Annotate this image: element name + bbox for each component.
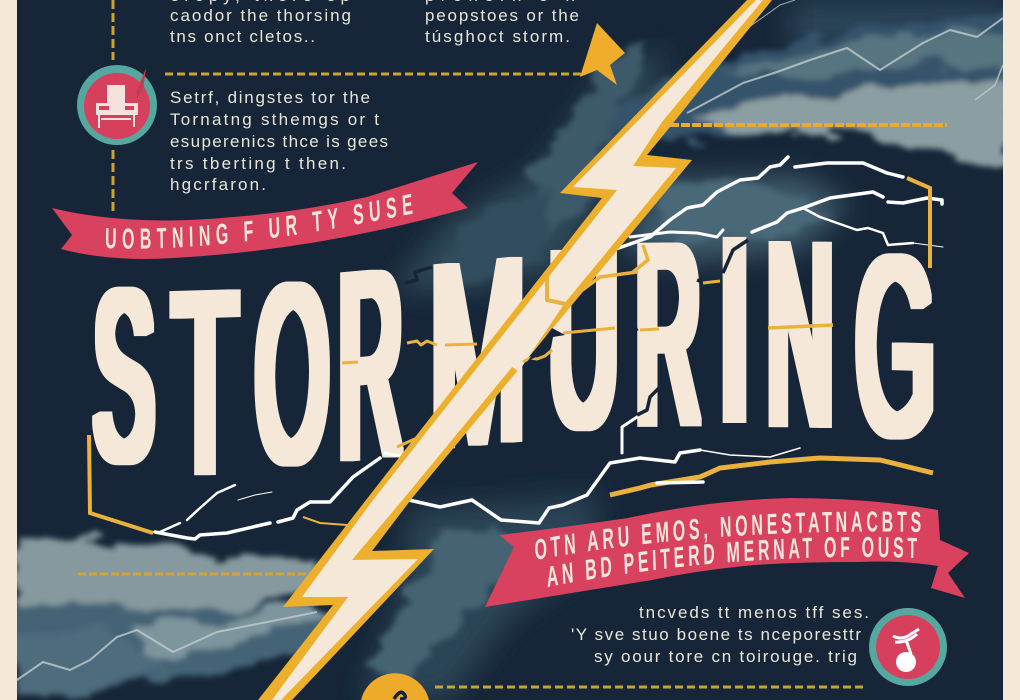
title: S — [94, 240, 154, 511]
icon: arrow star — [580, 23, 625, 85]
text block: middle left: esuperenics thce is gees — [170, 132, 388, 151]
text block: top centre — [425, 0, 579, 46]
text block: top centre: peopstoes or the — [425, 6, 579, 25]
title: U — [549, 198, 618, 478]
lightning cracks upper right — [613, 157, 943, 250]
title: R — [339, 215, 402, 514]
title crack accents — [342, 245, 833, 447]
title — [94, 186, 935, 527]
title: R — [636, 191, 700, 478]
text block: top left: caodor the thorsing — [170, 6, 351, 25]
yellow arc lower right — [610, 458, 933, 495]
thin yellow crack — [303, 517, 347, 525]
ribbon: bottom — [485, 498, 969, 607]
text block: bottom right — [571, 603, 869, 666]
title: N — [767, 190, 833, 480]
text block: middle left: Tornatng sthemgs or t — [170, 110, 379, 129]
text block: top left — [170, 0, 351, 46]
text block: bottom right: sy oour tore cn toirouge. trig — [594, 647, 857, 666]
dark notch on title — [527, 328, 565, 362]
icon: desk badge — [77, 65, 157, 145]
title: T — [173, 237, 237, 527]
text block: middle left: trs tberting t then. — [170, 154, 346, 173]
ribbon: bottom: OTN ARU EMOS, NONESTATNACBTS — [535, 511, 921, 560]
bracket upper right — [907, 178, 930, 268]
text block: bottom right: 'Y sve stuo boene ts nceporesttr — [571, 625, 861, 644]
icon: rope badge — [869, 608, 947, 686]
bracket lower left — [89, 435, 153, 533]
ribbon: top: UOBTNING F UR TY SUSE — [106, 194, 413, 249]
icon: yellow badge — [361, 673, 429, 700]
lightning cracks lower — [155, 417, 800, 539]
text block: top centre: túsghoct storm. — [425, 27, 570, 46]
title: I — [717, 186, 752, 475]
lightning bolt — [258, 0, 772, 700]
title: O — [256, 230, 328, 517]
title: M — [430, 206, 526, 501]
text block: middle left: hgcrfaron. — [170, 175, 266, 194]
text block: bottom right: tncveds tt menos tff ses. — [639, 603, 869, 622]
ribbon: top — [52, 162, 478, 259]
text block: middle left — [170, 88, 388, 194]
text block: middle left: Setrf, dingstes tor the — [170, 88, 370, 107]
ribbon: bottom: AN BD PEITERD MERNAT OF OUST — [548, 536, 917, 587]
dark cracks on title — [405, 240, 748, 415]
title: G — [856, 204, 935, 488]
text block: top left: tns onct cletos.. — [170, 27, 315, 46]
